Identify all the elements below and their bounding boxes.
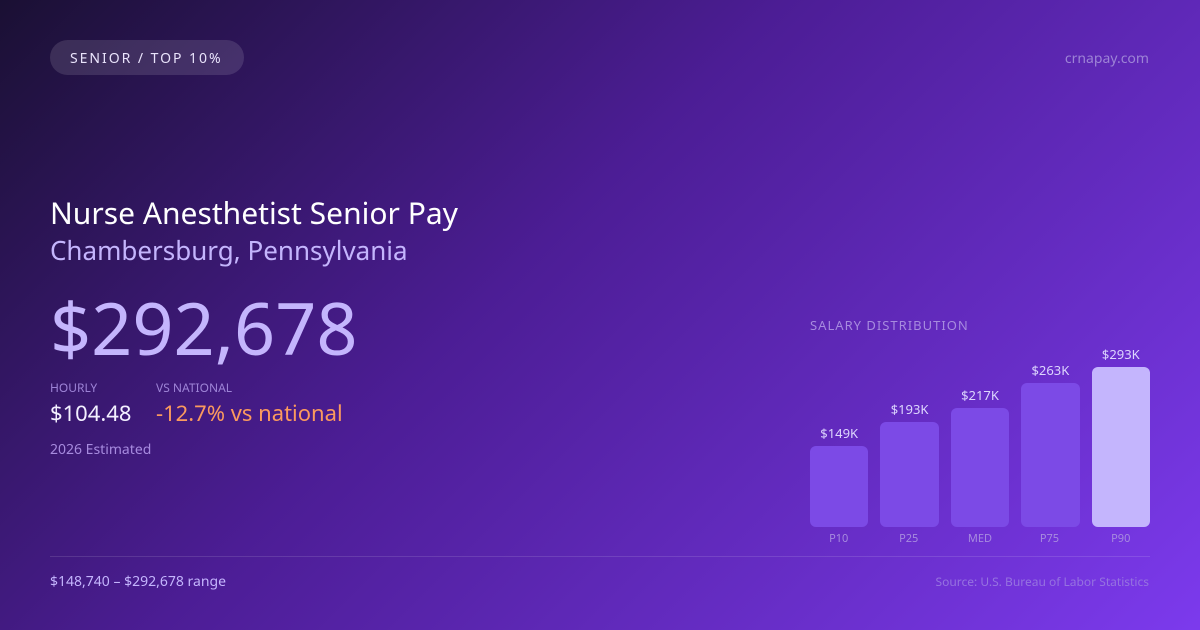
badge: senior / top 10% (50, 40, 244, 75)
bar: median (951, 386, 1009, 546)
bar: P75 (1021, 361, 1080, 546)
bar: P10: P10 (829, 531, 848, 546)
stat: hourly (50, 379, 131, 428)
bar: P25 (880, 400, 939, 546)
subtitle: location: Chambersburg, Pennsylvania (50, 232, 408, 268)
bar: median: MED (968, 531, 992, 546)
salary range: $148,740 – $292,678 range (50, 572, 226, 591)
badge: senior / top 10%: SENIOR / TOP 10% (70, 49, 223, 68)
bar: P10: $149K (820, 424, 858, 442)
bar: P90: P90 (1111, 531, 1130, 546)
stat: vs national (156, 379, 343, 428)
hourly value: $104.48 (50, 398, 131, 428)
data year note: 2026 Estimated (50, 440, 151, 459)
bar: P25: P25 (899, 531, 918, 546)
bar: P75: $263K (1031, 361, 1069, 379)
vs national value: -12.7% vs national (156, 398, 343, 428)
bar: P10 (810, 424, 868, 546)
site domain: crnapay.com (1065, 49, 1149, 68)
bar: median: $217K (961, 386, 999, 404)
bar: P25: $193K (891, 400, 928, 418)
bar: P90: $293K (1102, 345, 1140, 363)
vs national label: VS NATIONAL (156, 379, 232, 396)
bar: P90 (1092, 345, 1150, 546)
hourly label: HOURLY (50, 379, 97, 396)
source: Source: U.S. Bureau of Labor Statistics (936, 573, 1149, 590)
headline salary: $292,678 (50, 279, 358, 377)
title: Nurse Anesthetist Senior Pay (50, 192, 458, 233)
chart heading: SALARY DISTRIBUTION (810, 316, 969, 334)
bar: P75: P75 (1040, 531, 1059, 546)
